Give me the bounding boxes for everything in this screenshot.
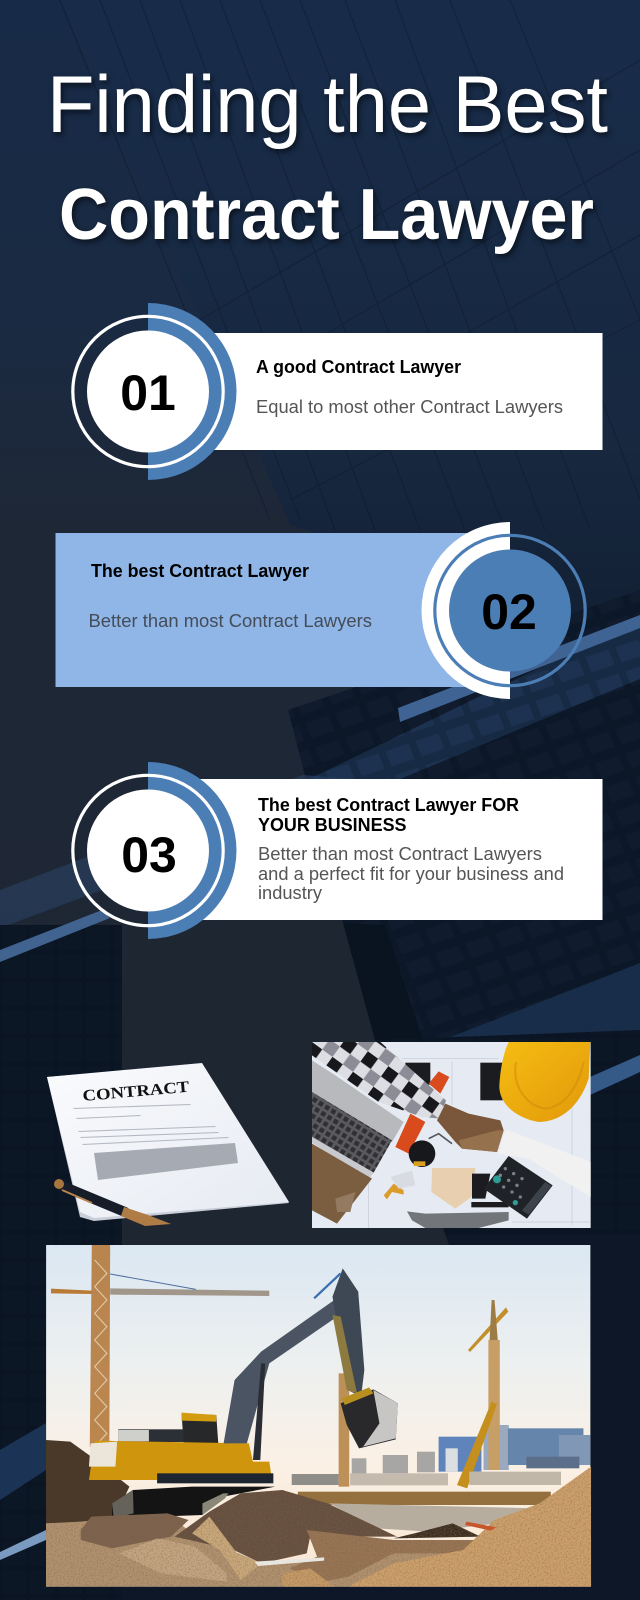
distant towers [352, 1452, 435, 1475]
heading 02: The best Contract Lawyer [91, 561, 309, 581]
panel: step 01 [73, 303, 603, 480]
body 03: and a perfect fit for your business and [258, 863, 564, 884]
body [89, 1441, 271, 1480]
white sleeve [498, 1129, 591, 1197]
badge 02 [422, 522, 585, 699]
card 01 [148, 333, 602, 450]
title line 2: Contract Lawyer [59, 175, 594, 255]
laptop [312, 1060, 404, 1224]
sky and horizon [46, 1245, 590, 1587]
heading 03 [258, 795, 519, 835]
checked sleeve [312, 1042, 446, 1119]
title [47, 60, 608, 255]
city buildings [439, 1425, 590, 1472]
excavator [89, 1268, 398, 1483]
panel: step 03 [73, 762, 603, 939]
body 03 [258, 843, 564, 903]
pen [54, 1179, 171, 1226]
engine cover [118, 1429, 184, 1442]
badge 01 [73, 303, 237, 480]
body 03: industry [258, 882, 323, 903]
badge 03: 03 [121, 827, 177, 883]
badge 01: 01 [120, 365, 176, 421]
boom [224, 1298, 347, 1443]
black phone [471, 1174, 509, 1207]
foreground sand and mounds [46, 1467, 591, 1587]
site huts and fence [292, 1472, 561, 1505]
card 03 [148, 779, 602, 920]
body 02: Better than most Contract Lawyers [88, 610, 372, 631]
centre crane [339, 1373, 349, 1487]
small parts [384, 1170, 415, 1199]
tags [395, 1071, 449, 1154]
debris on the ground [255, 1522, 496, 1566]
image: handshake over plans [312, 1042, 591, 1228]
card 02 [56, 533, 510, 687]
panel: step 02 [56, 522, 585, 699]
body 03: Better than most Contract Lawyers [258, 843, 542, 864]
hard hat [499, 1042, 590, 1122]
heading 01: A good Contract Lawyer [256, 357, 461, 377]
wrench [407, 1211, 509, 1228]
body 01: Equal to most other Contract Lawyers [256, 396, 563, 417]
wooden house model [431, 1168, 475, 1209]
cab [182, 1413, 218, 1443]
tape measure [409, 1134, 452, 1167]
arm [333, 1268, 364, 1397]
bucket [341, 1389, 398, 1448]
hands [437, 1104, 504, 1152]
right crane [457, 1300, 508, 1488]
title line 1: Finding the Best [47, 60, 608, 150]
contract paper: CONTRACT [82, 1079, 190, 1105]
calculator [484, 1156, 553, 1219]
left tower crane [51, 1245, 269, 1447]
heading 03: The best Contract Lawyer FOR [258, 795, 519, 815]
image: excavator on building site [46, 1245, 591, 1587]
heading 03: YOUR BUSINESS [258, 815, 406, 835]
cylinder [253, 1363, 265, 1460]
badge 03 [73, 762, 237, 939]
contract paper [47, 1063, 289, 1221]
image: contract and pen [47, 1063, 289, 1226]
soil behind and tracks [46, 1440, 536, 1532]
badge 02: 02 [481, 584, 537, 640]
